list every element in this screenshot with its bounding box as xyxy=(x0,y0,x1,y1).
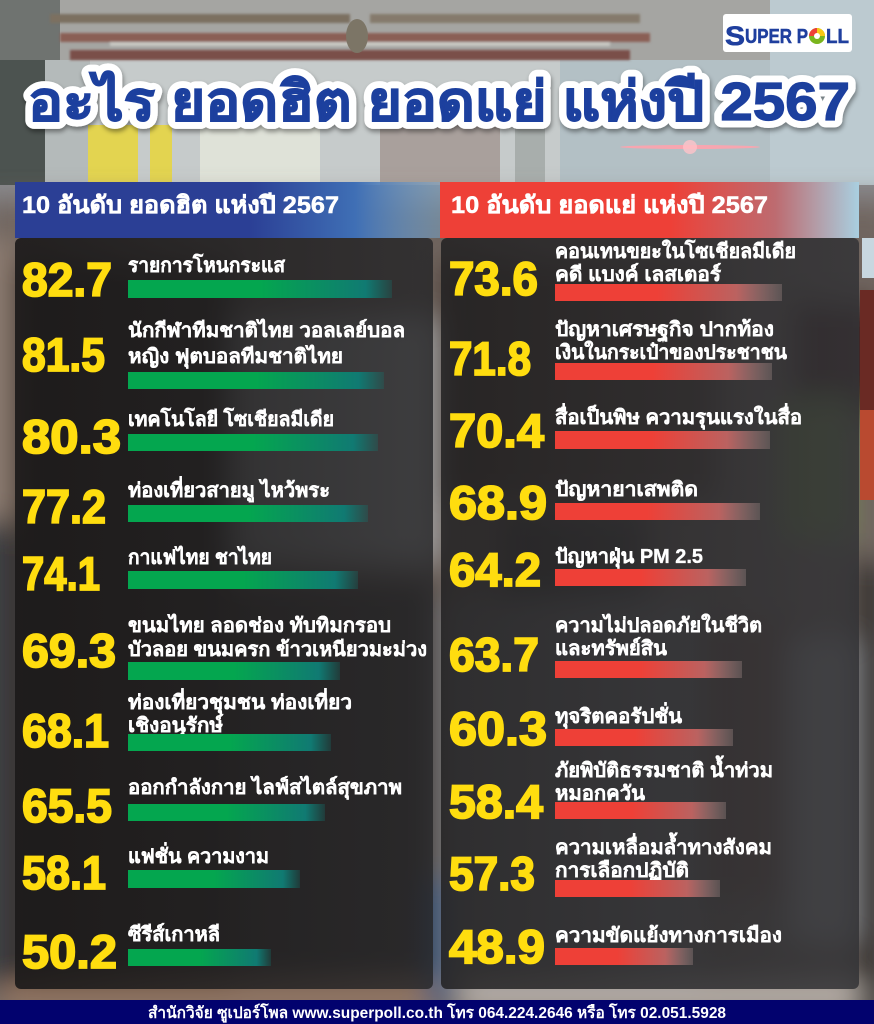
row 4: 68.9 xyxy=(449,476,547,529)
header: top 10 hits: 10 อันดับ ยอดฮิต แห่งปี 2567 xyxy=(22,192,339,219)
row 8: ภัยพิบัติธรรมชาติ น้ำท่วม xyxy=(555,755,773,782)
row 6 xyxy=(449,613,762,681)
row 5 xyxy=(22,545,358,600)
row 3: สื่อเป็นพิษ ความรุนแรงในสื่อ xyxy=(555,402,802,430)
row 4: ท่องเที่ยวสายมู ไหว้พระ xyxy=(128,475,330,504)
logo: Super Poll: LL xyxy=(826,26,849,48)
row 7 xyxy=(449,701,733,755)
row 2: 81.5 xyxy=(22,328,105,381)
row 7 xyxy=(22,687,352,757)
row 5: กาแฟไทย ชาไทย xyxy=(128,545,272,569)
row 8: หมอกควัน xyxy=(555,783,645,805)
panel: worst ranking xyxy=(441,238,859,989)
row 2: ปัญหาเศรษฐกิจ ปากท้อง xyxy=(555,318,774,343)
row 7: เชิงอนุรักษ์ xyxy=(128,714,223,738)
row 6: ความไม่ปลอดภัยในชีวิต xyxy=(555,613,762,637)
row 1 xyxy=(449,239,796,305)
footer xyxy=(0,1000,874,1024)
row 3 xyxy=(449,402,802,457)
row 8: 65.5 xyxy=(22,779,112,832)
footer: สำนักวิจัย ซูเปอร์โพล www.superpoll.co.th โทร 064.224.2646 หรือ โทร 02.051.5928 xyxy=(148,1002,726,1024)
row 1: คดี แบงค์ เลสเตอร์ xyxy=(555,263,721,286)
row 10: ซีรีส์เกาหลี xyxy=(128,923,220,946)
row 9: การเลือกปฏิบัติ xyxy=(555,859,689,882)
row 9: 57.3 xyxy=(449,847,535,900)
header: top 10 worst xyxy=(440,182,859,238)
row 7: ท่องเที่ยวชุมชน ท่องเที่ยว xyxy=(128,687,352,715)
row 4: 77.2 xyxy=(22,480,106,533)
row 9: 58.1 xyxy=(22,846,106,899)
row 9 xyxy=(22,841,300,899)
row 1: รายการโหนกระแส xyxy=(128,253,286,277)
row 4 xyxy=(449,476,760,529)
row 3 xyxy=(22,407,378,463)
row 5: 64.2 xyxy=(449,543,541,596)
logo: Super Poll: S xyxy=(725,21,745,51)
row 1: คอนเทนขยะในโซเชียลมีเดีย xyxy=(555,239,796,263)
row 2: หญิง ฟุตบอลทีมชาติไทย xyxy=(128,344,343,369)
row 7: ทุจริตคอรัปชั่น xyxy=(555,701,682,729)
row 2 xyxy=(22,318,405,389)
header: top 10 hits xyxy=(15,182,440,238)
row 8 xyxy=(449,755,773,828)
row 7: 60.3 xyxy=(449,702,547,755)
row 10: 50.2 xyxy=(22,925,117,978)
row 10 xyxy=(449,920,782,973)
panel: hits ranking xyxy=(15,238,433,989)
row 3: เทคโนโลยี โซเชียลมีเดีย xyxy=(128,407,334,431)
row 9: แฟชั่น ความงาม xyxy=(128,841,269,868)
logo: Super Poll xyxy=(723,14,852,52)
row 8: 58.4 xyxy=(449,775,543,828)
row 5: 74.1 xyxy=(22,547,100,600)
row 1: 82.7 xyxy=(22,253,112,306)
header: top 10 worst: 10 อันดับ ยอดแย่ แห่งปี 2567 xyxy=(451,192,768,219)
row 2: นักกีฬาทีมชาติไทย วอลเลย์บอล xyxy=(128,318,405,342)
row 8 xyxy=(22,775,402,832)
row 6: 69.3 xyxy=(22,624,116,677)
row 7: 68.1 xyxy=(22,704,109,757)
row 5 xyxy=(449,543,746,596)
row 3: 70.4 xyxy=(449,404,544,457)
row 6: ขนมไทย ลอดช่อง ทับทิมกรอบ xyxy=(128,613,391,637)
logo: Super Poll: UPER P xyxy=(745,26,808,48)
row 6: และทรัพย์สิน xyxy=(555,637,667,660)
row 6: บัวลอย ขนมครก ข้าวเหนียวมะม่วง xyxy=(128,638,427,661)
row 4: ปัญหายาเสพติด xyxy=(555,479,698,501)
row 3: 80.3 xyxy=(22,410,121,463)
title: อะไร ยอดฮิต ยอดแย่ แห่งปี 2567 xyxy=(28,70,850,132)
row 6 xyxy=(22,613,427,680)
row 5: ปัญหาฝุ่น PM 2.5 xyxy=(555,546,703,569)
row 2 xyxy=(449,318,787,385)
row 1 xyxy=(22,253,392,306)
row 2: 71.8 xyxy=(449,332,531,385)
title: อะไร ยอดฮิต ยอดแย่ แห่งปี 2567 xyxy=(28,70,850,132)
row 10 xyxy=(22,923,271,978)
row 8: ออกกำลังกาย ไลฟ์สไตล์สุขภาพ xyxy=(128,775,402,800)
row 9: ความเหลื่อมล้ำทางสังคม xyxy=(555,832,772,859)
row 10: ความขัดแย้งทางการเมือง xyxy=(555,924,782,947)
row 1: 73.6 xyxy=(449,252,538,305)
row 9 xyxy=(449,832,772,900)
row 4 xyxy=(22,475,368,533)
row 2: เงินในกระเป๋าของประชาชน xyxy=(555,340,787,364)
row 6: 63.7 xyxy=(449,628,539,681)
row 10: 48.9 xyxy=(449,920,545,973)
